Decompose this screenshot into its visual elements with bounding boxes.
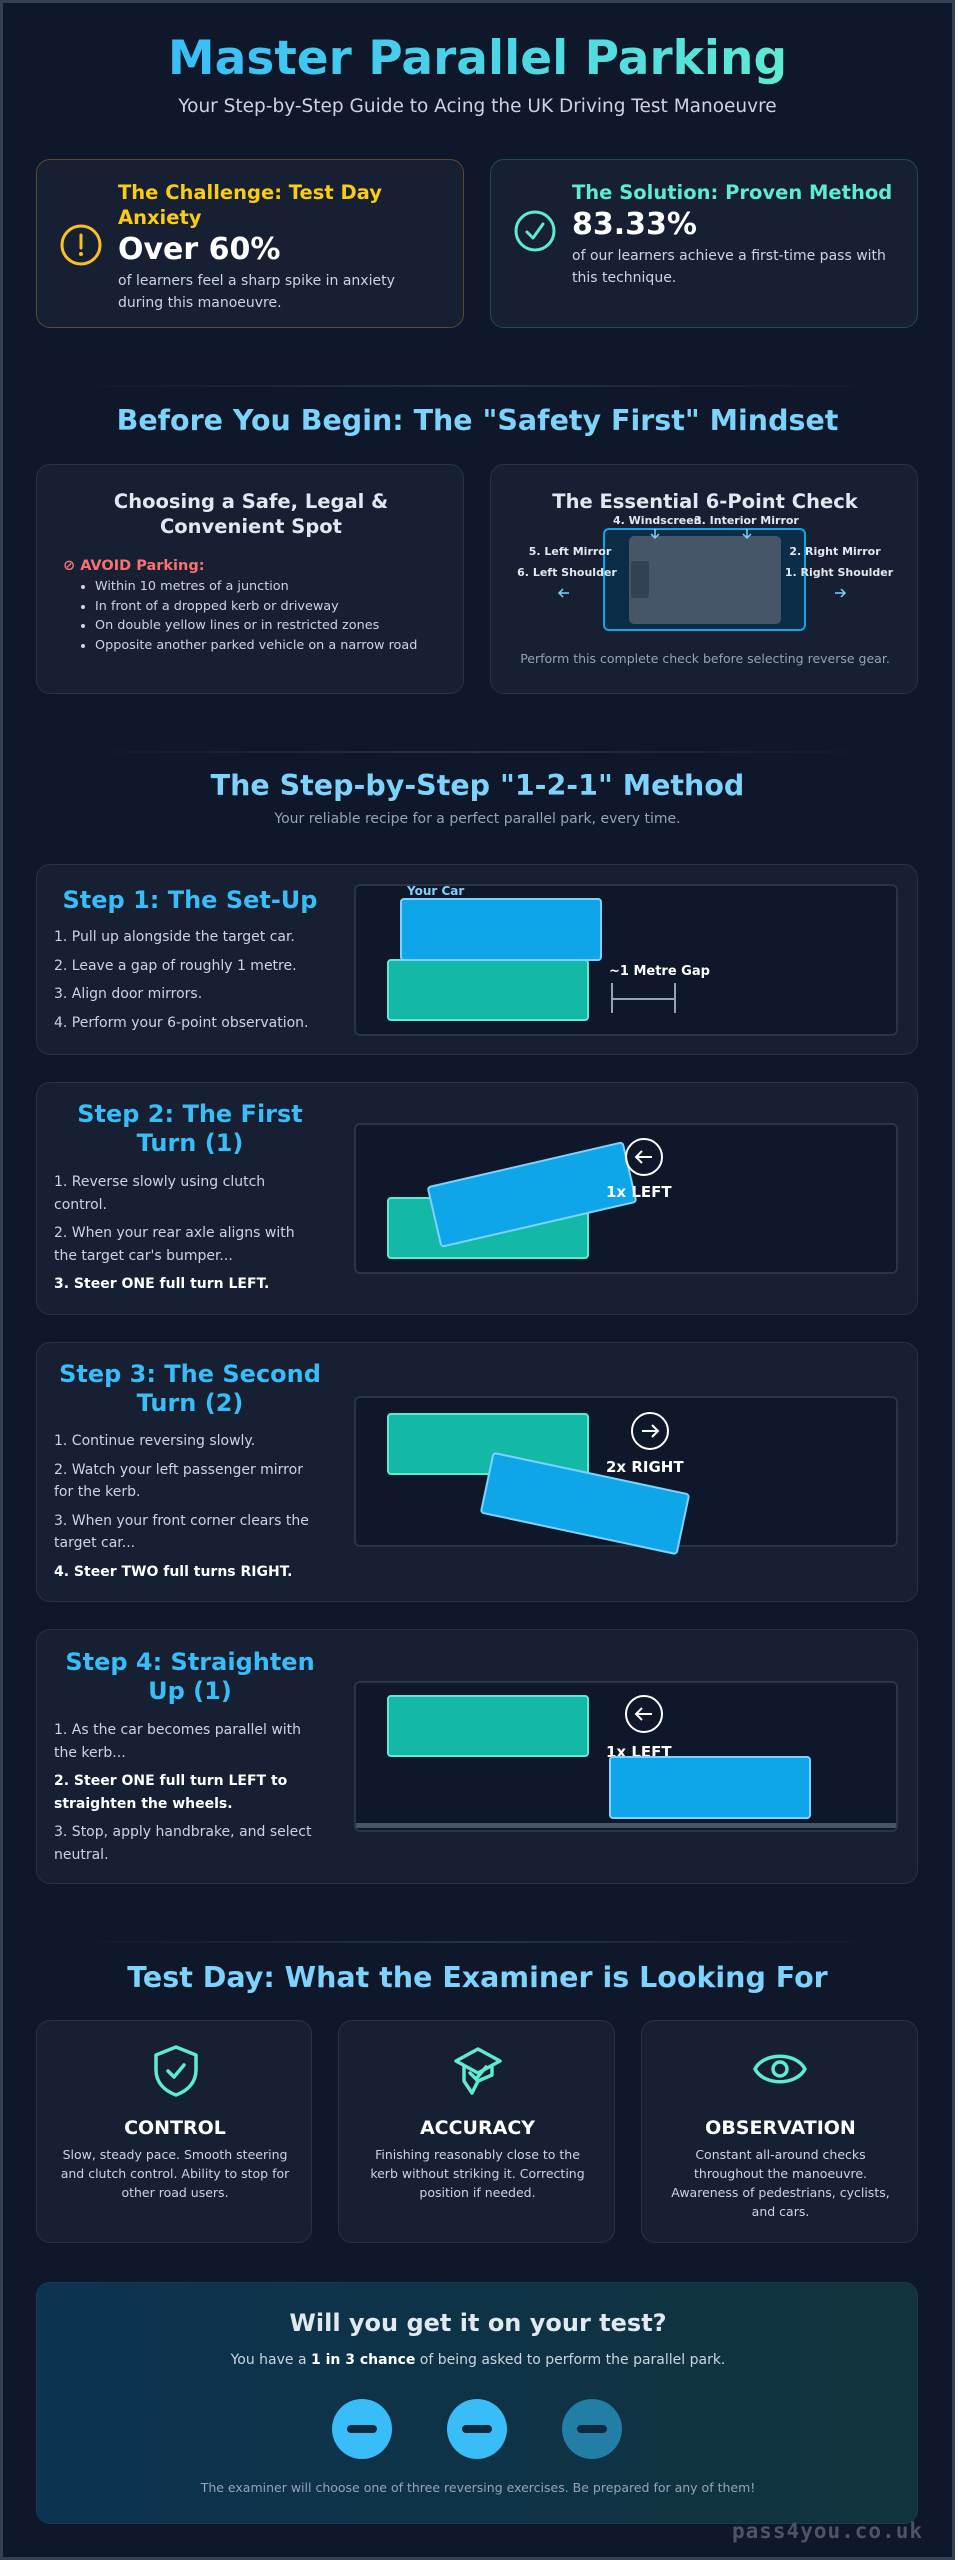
car diagram xyxy=(517,514,894,631)
heading: examiner: Test Day: What the Examiner is Looking For xyxy=(127,1961,828,1994)
panel: control xyxy=(36,2020,312,2243)
step 1 list: 3. Align door mirrors. xyxy=(54,986,202,1002)
panel heading: The Essential 6-Point Check xyxy=(552,490,858,513)
avoid list xyxy=(63,558,417,652)
step 1 heading: Step 1: The Set-Up xyxy=(62,886,317,914)
heading: safety first: Before You Begin: The "Safety First" Mindset xyxy=(117,404,838,437)
panel: challenge xyxy=(36,159,464,328)
step 1 list: 1. Pull up alongside the target car. xyxy=(54,929,295,945)
icon: warning xyxy=(60,224,102,266)
avoid list: Within 10 metres of a junction xyxy=(95,579,289,594)
control text xyxy=(61,2117,290,2200)
diagram: step 3: 2x RIGHT xyxy=(606,1458,684,1476)
step 2 heading: Turn (1) xyxy=(137,1129,243,1157)
step 1 list: 2. Leave a gap of roughly 1 metre. xyxy=(54,958,297,974)
panel heading: Convenient Spot xyxy=(160,515,342,538)
step 2 list: 1. Reverse slowly using clutch control. xyxy=(54,1174,265,1212)
solution text: 83.33% xyxy=(572,207,697,242)
icon: shield xyxy=(154,2045,198,2097)
step 3 heading xyxy=(59,1360,321,1417)
step 4 heading xyxy=(65,1648,315,1705)
step 1 list: 4. Perform your 6-point observation. xyxy=(54,1014,309,1030)
icons: three exercises xyxy=(332,2399,622,2459)
panel: choosing spot xyxy=(36,464,464,694)
observation text: Constant all-around checks throughout the manoeuvre. Awareness of pedestrians, cyclists, and cars. xyxy=(671,2147,890,2219)
panel heading xyxy=(114,490,388,538)
control text: Slow, steady pace. Smooth steering and clutch control. Ability to stop for other road users. xyxy=(61,2147,289,2200)
avoid list: On double yellow lines or in restricted zones xyxy=(95,618,379,633)
step 3 heading: Turn (2) xyxy=(137,1389,243,1417)
challenge text: The Challenge: Test Day Anxiety xyxy=(118,181,382,229)
accuracy text xyxy=(370,2117,585,2200)
step 2 heading xyxy=(77,1100,303,1157)
icon: left arrow xyxy=(625,1138,663,1176)
car diagram: 3. Interior Mirror xyxy=(694,514,799,527)
step 3 list: 3. When your front corner clears the target car... xyxy=(54,1512,309,1551)
control text: CONTROL xyxy=(124,2117,226,2139)
panel: 6-point check xyxy=(490,464,918,694)
panel: observation xyxy=(641,2020,918,2243)
solution text: The Solution: Proven Method xyxy=(572,181,892,204)
avoid list: ⊘ AVOID Parking: xyxy=(63,558,204,574)
caption: Perform this complete check before selecting reverse gear. xyxy=(520,651,890,666)
icon: right arrow xyxy=(631,1412,669,1450)
heading: method: The Step-by-Step "1-2-1" Method xyxy=(211,769,744,802)
icon: eye xyxy=(753,2054,807,2084)
diagram: step 2: 1x LEFT xyxy=(606,1183,672,1201)
panel: step 1 xyxy=(36,864,918,1055)
step 4 list xyxy=(54,1722,312,1862)
step 4 heading: Step 4: Straighten xyxy=(65,1648,315,1676)
step 2 list: 3. Steer ONE full turn LEFT. xyxy=(54,1276,269,1292)
accuracy text: Finishing reasonably close to the kerb without striking it. Correcting position if needed. xyxy=(370,2147,585,2200)
panel: accuracy xyxy=(338,2020,615,2243)
diagram: step 4 xyxy=(354,1681,898,1832)
step 4 heading: Up (1) xyxy=(148,1677,232,1705)
car diagram: 6. Left Shoulder xyxy=(517,566,617,579)
panel: chance xyxy=(36,2282,918,2524)
car diagram: 5. Left Mirror xyxy=(529,545,612,558)
challenge text xyxy=(118,181,395,311)
solution text: of our learners achieve a first-time pass with this technique. xyxy=(572,248,886,286)
car diagram: 1. Right Shoulder xyxy=(785,566,894,579)
panel heading: Choosing a Safe, Legal & xyxy=(114,490,388,513)
step 4 list: 1. As the car becomes parallel with the kerb... xyxy=(54,1722,301,1760)
diagram: step 4: 1x LEFT xyxy=(606,1743,672,1761)
challenge text: Over 60% xyxy=(118,232,280,267)
panel: step 3 xyxy=(36,1342,918,1602)
title: Master Parallel Parking xyxy=(168,31,787,86)
step 3 heading: Step 3: The Second xyxy=(59,1360,321,1388)
icon: left arrow xyxy=(625,1695,663,1733)
panel: step 4 xyxy=(36,1629,918,1884)
watermark: pass4you.co.uk xyxy=(732,2519,923,2543)
subheading: Your reliable recipe for a perfect parallel park, every time. xyxy=(274,811,681,827)
challenge text: of learners feel a sharp spike in anxiety during this manoeuvre. xyxy=(118,273,395,311)
icon: target cap xyxy=(454,2047,502,2095)
step 4 list: 2. Steer ONE full turn LEFT to straighten the wheels. xyxy=(54,1773,287,1812)
panel: step 2 xyxy=(36,1082,918,1315)
diagram: step 1: Your Car xyxy=(407,884,464,898)
step 2 list: 2. When your rear axle aligns with the target car's bumper... xyxy=(54,1225,295,1264)
step 3 list: 2. Watch your left passenger mirror for the kerb. xyxy=(54,1462,303,1500)
chance heading: Will you get it on your test? xyxy=(289,2309,667,2337)
diagram: step 1: ~1 Metre Gap xyxy=(609,964,710,979)
step 4 list: 3. Stop, apply handbrake, and select neutral. xyxy=(54,1824,311,1862)
step 3 list: 4. Steer TWO full turns RIGHT. xyxy=(54,1564,292,1580)
avoid list: Opposite another parked vehicle on a narrow road xyxy=(95,638,417,652)
diagram: step 3 xyxy=(354,1396,898,1547)
step 2 list xyxy=(54,1174,295,1292)
diagram: step 2 xyxy=(354,1123,898,1274)
step 1 list xyxy=(54,929,309,1030)
subtitle: Your Step-by-Step Guide to Acing the UK Driving Test Manoeuvre xyxy=(178,96,777,117)
solution text xyxy=(572,181,892,286)
step 2 heading: Step 2: The First xyxy=(77,1100,303,1128)
step 3 list xyxy=(54,1433,309,1580)
diagram: step 1 xyxy=(354,884,898,1036)
icon: check xyxy=(514,210,556,252)
chance caption: The examiner will choose one of three reversing exercises. Be prepared for any of them! xyxy=(201,2480,755,2495)
chance text: You have a 1 in 3 chance of being asked to perform the parallel park. xyxy=(231,2352,725,2368)
accuracy text: ACCURACY xyxy=(420,2117,535,2139)
car diagram: 4. Windscreen xyxy=(613,514,702,527)
panel: solution xyxy=(490,159,918,328)
step 3 list: 1. Continue reversing slowly. xyxy=(54,1433,255,1449)
avoid list: In front of a dropped kerb or driveway xyxy=(95,598,339,614)
observation text: OBSERVATION xyxy=(705,2117,856,2139)
car diagram: 2. Right Mirror xyxy=(789,545,881,558)
